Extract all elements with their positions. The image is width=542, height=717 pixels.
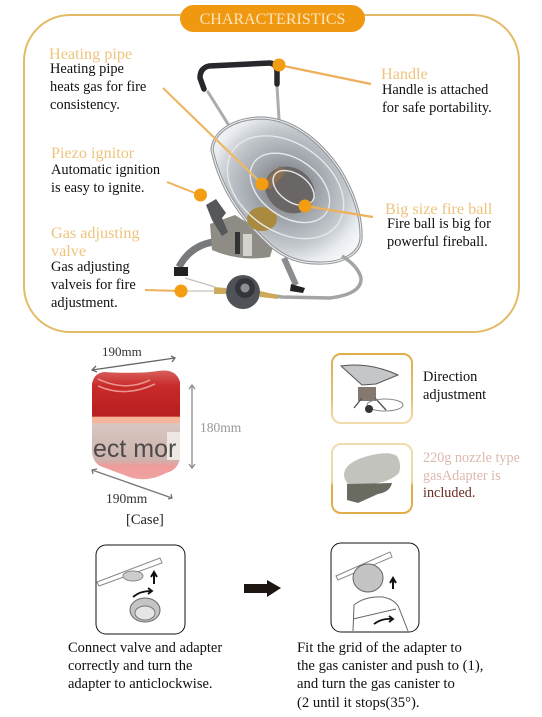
title pill [180,5,365,32]
text: big size fire ball: Big size fire ball [385,200,493,218]
text: heating pipe: heats gas for fire [50,79,146,95]
text: step 1: correctly and turn the [68,658,192,674]
text: step 2: the gas canister and push to (1), [297,658,483,674]
panel: step 1 diagram [96,545,185,634]
text: piezo ignitor: Automatic ignition [51,162,160,178]
text: piezo ignitor: is easy to ignite. [51,180,145,196]
dimension: height: 180mm [200,420,242,435]
title pill: CHARACTERISTICS [200,11,345,28]
icon: mini heater [341,365,403,413]
icon: burner base and legs [174,199,305,293]
text: big size fire ball: powerful fireball. [387,234,488,250]
text: gas adjusting valve: Gas adjusting [51,259,130,275]
dimension: top: 190mm [102,344,142,359]
callout: piezo pointer [167,182,207,202]
icon: adapter grid [353,564,383,592]
arrow: top width [92,356,175,372]
icon: brass nut [247,207,277,231]
icon: brass connector [214,287,278,299]
icon: handle [200,63,279,124]
icon: hose line drawing [336,552,392,580]
heater product image [174,63,363,309]
callout: valve pointer [145,284,188,298]
text: step 2: Fit the grid of the adapter to [297,640,462,656]
icon: adapter line drawing [130,598,160,622]
icon: reflector dish [212,118,361,263]
characteristics panel frame [24,15,519,332]
text: heating pipe [49,45,146,113]
text: step 1: adapter to anticlockwise. [68,676,213,692]
text: adapter included: gasAdapter is [423,468,501,484]
icon: burner head [256,157,324,223]
panel: direction adjustment thumbnail [332,354,412,423]
icon: red case: ect mor [93,435,176,463]
text: heating pipe: Heating pipe [49,45,132,63]
text: piezo ignitor: Piezo ignitor [51,144,135,162]
text: big size fire ball [385,200,493,250]
caption: case: [Case] [126,512,164,528]
arrow: height [189,385,195,468]
text: handle [381,65,492,116]
text: gas adjusting valve: valveis for fire [51,277,136,293]
text: handle: Handle [381,65,428,83]
callout: fire ball pointer [298,200,373,217]
text: handle: for safe portability. [382,100,492,116]
text: heating pipe: consistency. [50,97,120,113]
text: step 2: and turn the gas canister to [297,676,455,692]
text: step 1 [68,640,222,692]
icon: valve line drawing [97,558,162,586]
text: piezo ignitor [51,144,160,196]
arrow: turn [374,616,393,624]
arrow: push up [390,578,396,589]
text: step 2 [297,640,483,711]
text: adapter included [423,450,520,501]
icon: red case [92,370,180,479]
icon: gas valve knob [226,275,260,309]
text: gas adjusting valve: adjustment. [51,295,118,311]
text: adapter included: 220g nozzle type [423,450,520,466]
panel: step 2 diagram [331,543,419,632]
text: big size fire ball: Fire ball is big for [387,216,491,232]
text: direction adjustment: adjustment [423,387,486,403]
arrow: push up [151,572,157,584]
callout: heating pipe pointer [163,88,268,190]
callout: handle pointer [272,58,371,84]
icon: wire guard [208,114,363,260]
arrow: to next step [244,580,281,597]
icon: adapter [344,453,400,503]
icon: canister [353,597,408,631]
arrow: bottom width [92,469,172,499]
text: direction adjustment: Direction [423,369,477,385]
text: gas adjusting valve [51,224,140,311]
text: adapter included: included. [423,485,475,501]
text: step 1: Connect valve and adapter [68,640,222,656]
text: gas adjusting valve: valve [51,242,86,260]
panel: gas adapter thumbnail [332,444,412,513]
text: direction adjustment [423,369,486,403]
case product with dimensions [92,344,242,528]
icon: valve lever [185,278,215,291]
text: handle: Handle is attached [382,82,489,98]
icon: gas hose [262,256,361,298]
dimension: bottom: 190mm [106,491,148,506]
arrow: turn [133,588,152,597]
text: gas adjusting valve: Gas adjusting [51,224,140,242]
text: heating pipe: Heating pipe [50,61,124,77]
text: step 2: (2 until it stops(35°). [297,695,420,711]
